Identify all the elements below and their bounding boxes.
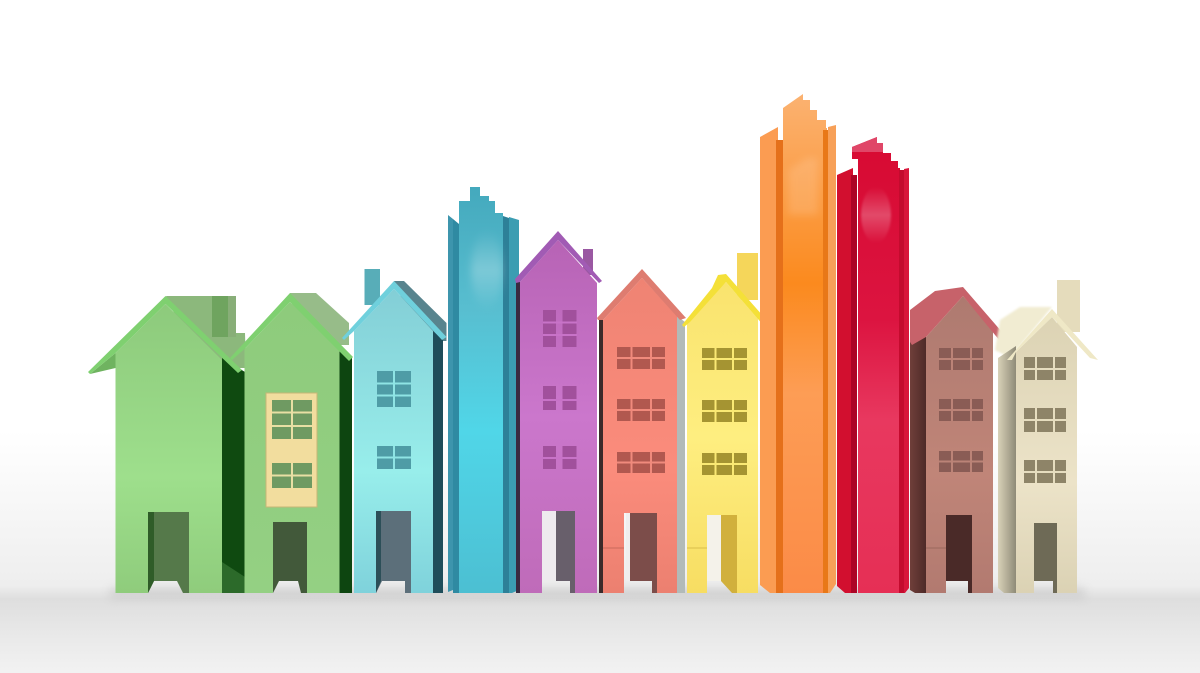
house: cream — [995, 280, 1098, 593]
right flange — [503, 216, 509, 593]
back roof — [394, 281, 446, 341]
chimney — [737, 253, 758, 300]
tower: red — [837, 137, 909, 593]
main body — [852, 137, 900, 593]
left flange — [760, 127, 778, 593]
chimney — [583, 249, 593, 275]
door — [946, 515, 972, 593]
house: green with yellow panel — [230, 293, 353, 593]
door — [630, 513, 657, 593]
main body — [459, 187, 503, 593]
eave soffit — [90, 353, 116, 374]
side wall — [516, 282, 520, 593]
door — [721, 515, 737, 593]
tower: orange — [760, 94, 836, 593]
base line — [603, 547, 624, 549]
side wall — [222, 358, 245, 593]
front wall — [926, 296, 993, 593]
front wall — [603, 278, 677, 593]
door — [1034, 523, 1057, 593]
side wall — [433, 331, 443, 593]
side wall — [339, 349, 352, 593]
side wall — [599, 320, 603, 593]
house: purple — [515, 231, 602, 593]
chimney — [364, 269, 380, 305]
house: yellow — [682, 253, 770, 593]
chimney — [1057, 280, 1080, 332]
roof — [515, 231, 602, 283]
roof — [342, 281, 446, 340]
door — [273, 522, 307, 593]
roof — [88, 296, 242, 374]
windows — [543, 310, 577, 469]
windows — [939, 348, 983, 472]
side wall — [910, 320, 926, 593]
front wall — [116, 304, 222, 593]
house: brown — [910, 287, 1008, 593]
front wall — [354, 289, 433, 593]
front wall — [687, 282, 758, 593]
back roof — [995, 307, 1052, 358]
house: light blue — [342, 269, 446, 593]
roof — [682, 274, 770, 327]
right flange — [823, 130, 828, 593]
roof — [597, 269, 686, 320]
floor shadow — [110, 588, 1085, 598]
door — [556, 511, 575, 593]
base line — [687, 547, 707, 549]
window panel — [266, 393, 317, 507]
tower: teal — [448, 187, 519, 593]
highlight — [471, 230, 503, 310]
left flange — [448, 215, 453, 592]
left flange — [837, 168, 853, 593]
top highlight — [852, 137, 883, 152]
base line — [926, 547, 946, 549]
house: salmon — [597, 269, 686, 593]
house: light green — [88, 296, 246, 593]
door — [376, 511, 411, 593]
back roof and chimney — [166, 296, 246, 368]
front wall — [520, 240, 597, 593]
front wall — [1016, 317, 1077, 593]
highlight — [788, 158, 818, 215]
door — [148, 512, 189, 593]
roof — [910, 287, 1008, 345]
main body — [783, 94, 827, 593]
windows — [1024, 357, 1066, 483]
front wall — [244, 302, 340, 593]
side wall — [998, 346, 1016, 593]
back roof — [290, 293, 349, 345]
roof — [1007, 309, 1098, 360]
windows — [377, 371, 411, 469]
roof — [230, 293, 353, 361]
highlight — [861, 187, 891, 243]
windows — [702, 348, 747, 475]
right flange — [899, 170, 904, 593]
windows — [617, 347, 665, 473]
